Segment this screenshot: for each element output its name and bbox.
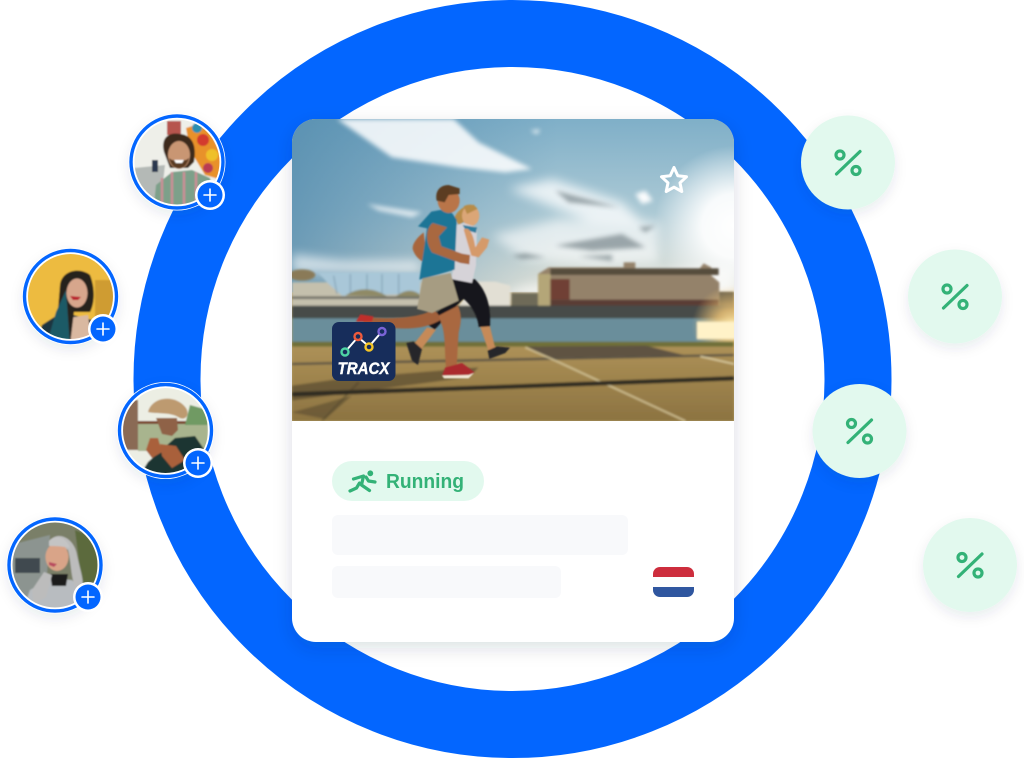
discount badge 3 bbox=[812, 384, 906, 478]
plus badge bbox=[195, 180, 225, 210]
icon: percent bbox=[958, 554, 982, 577]
left buildings bbox=[292, 282, 425, 307]
avatar: woman with yellow wall bbox=[22, 248, 120, 345]
photo: runners by the water bbox=[289, 119, 814, 421]
icon: percent bbox=[943, 285, 967, 308]
granary building bbox=[538, 262, 719, 306]
text placeholder: subtitle line bbox=[332, 566, 561, 598]
plus badge bbox=[73, 582, 103, 612]
discount badge 4 bbox=[923, 518, 1017, 612]
blue ring bbox=[167, 34, 858, 724]
woman runner bbox=[455, 205, 475, 225]
text placeholder: title line bbox=[332, 515, 628, 555]
icon: TRACX logo bbox=[332, 322, 396, 381]
panel: activity card bbox=[289, 119, 814, 642]
plus badge bbox=[88, 314, 118, 344]
avatar: grey-haired woman bbox=[6, 516, 105, 615]
discount badge 2 bbox=[908, 250, 1002, 344]
grass and ground bbox=[292, 342, 734, 347]
card background bbox=[292, 119, 734, 642]
avatar: man with hat bbox=[117, 382, 215, 480]
category pill: Running bbox=[332, 461, 484, 501]
icon: TRACX logo: TRACX bbox=[338, 360, 390, 378]
discount badge 1 bbox=[801, 116, 895, 210]
icon: favourite star bbox=[662, 168, 686, 192]
plus badge bbox=[183, 448, 213, 478]
man runner bbox=[413, 232, 426, 262]
icon: percent bbox=[836, 151, 860, 174]
icon: percent bbox=[848, 420, 872, 443]
category pill: Running: Running bbox=[386, 471, 464, 493]
avatar: man with beard bbox=[128, 114, 226, 210]
icon: runner bbox=[350, 470, 375, 491]
icon: Netherlands flag bbox=[653, 567, 694, 597]
water bbox=[292, 318, 734, 343]
quay bbox=[292, 306, 734, 319]
